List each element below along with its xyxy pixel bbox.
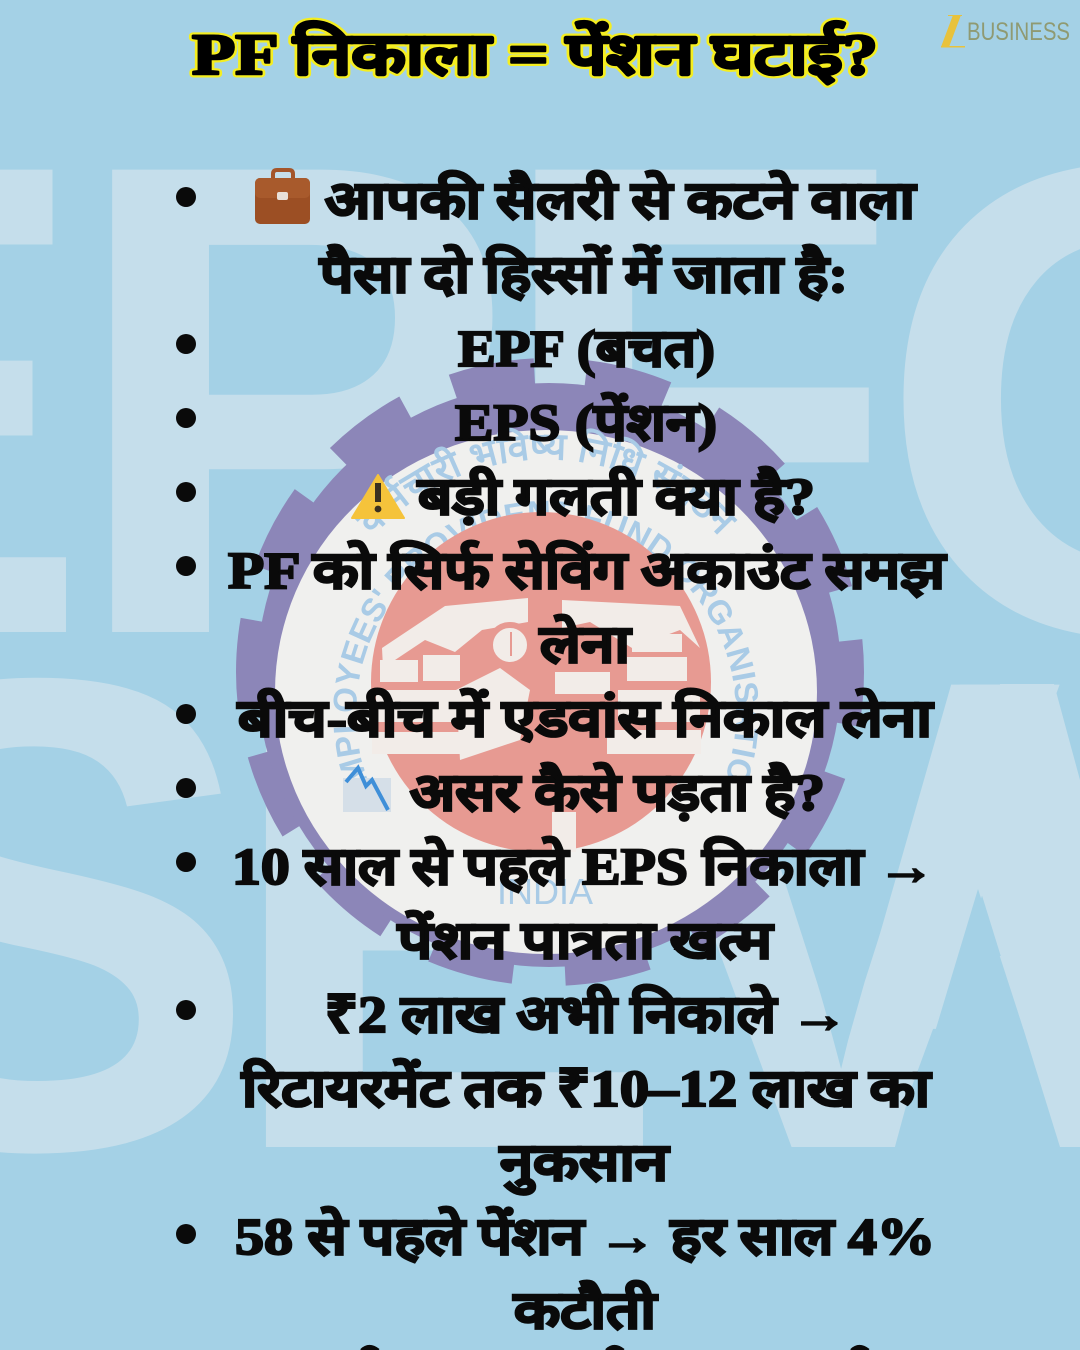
item: 2 lakh withdrawal, line 2: रिटायरमेंट तक ₹10–12 लाख का	[241, 1058, 933, 1118]
icon: warning sign	[352, 475, 404, 518]
heading: how it affects: असर कैसे पड़ता है?	[410, 762, 825, 822]
INDIA label: INDIA	[497, 871, 593, 912]
icon: briefcase	[255, 170, 310, 224]
bullet markers	[176, 187, 196, 1244]
outer Hindi ring text: कर्मचारी भविष्य निधि संगठन	[355, 428, 738, 534]
item: EPS before 10 years: 10 साल से पहले EPS निकाला →	[232, 836, 935, 896]
item: 2 lakh withdrawal: ₹2 लाख अभी निकाले →	[325, 984, 848, 1044]
heading: biggest mistake: बड़ी गलती क्या है?	[417, 466, 815, 526]
watermark: second row SEVA	[0, 540, 1080, 1290]
gear body	[257, 383, 841, 967]
bullet list	[176, 170, 947, 1350]
icon: yellow Z slash	[941, 15, 965, 48]
item: pension before 58, line 2: कटौती	[513, 1280, 659, 1340]
white disc	[275, 430, 817, 954]
item: pension before 58: 58 से पहले पेंशन → हर साल 4%	[235, 1206, 935, 1266]
English ring text	[334, 500, 758, 778]
item: 2 lakh withdrawal, line 3: नुकसान	[499, 1135, 670, 1195]
emblem: mother head	[490, 625, 530, 665]
item: PF as savings, line 2: लेना	[539, 614, 633, 674]
icon: falling chart	[343, 768, 391, 812]
item: EPS before 10 years, line 2: पेंशन पात्रता खत्म	[397, 910, 774, 970]
item: EPF: EPF (बचत)	[458, 321, 715, 378]
red emblem disc	[371, 512, 711, 852]
item: PF as savings: PF को सिर्फ सेविंग अकाउंट समझ	[228, 540, 947, 600]
item: salary split intro, line 2: पैसा दो हिस्सों में जाता है:	[319, 244, 848, 304]
brand logo: Z Business	[941, 15, 1070, 48]
watermark: second row SEVA: E	[221, 540, 669, 1290]
title: PF निकाला = पेंशन घटाई?	[192, 21, 878, 87]
title: PF निकाला = पेंशन घटाई?	[192, 21, 878, 87]
emblem: houses and figures	[372, 598, 701, 852]
gear teeth	[253, 375, 847, 969]
item: advance withdrawals: बीच-बीच में एडवांस निकाल लेना	[237, 688, 935, 748]
EPFO gear logo	[236, 358, 864, 986]
item: salary split intro: आपकी सैलरी से कटने वाला	[325, 170, 918, 230]
clipped next line tops	[362, 1348, 868, 1350]
item: EPS: EPS (पेंशन)	[455, 392, 717, 452]
watermark: second row SEVA: V	[616, 540, 1068, 1290]
